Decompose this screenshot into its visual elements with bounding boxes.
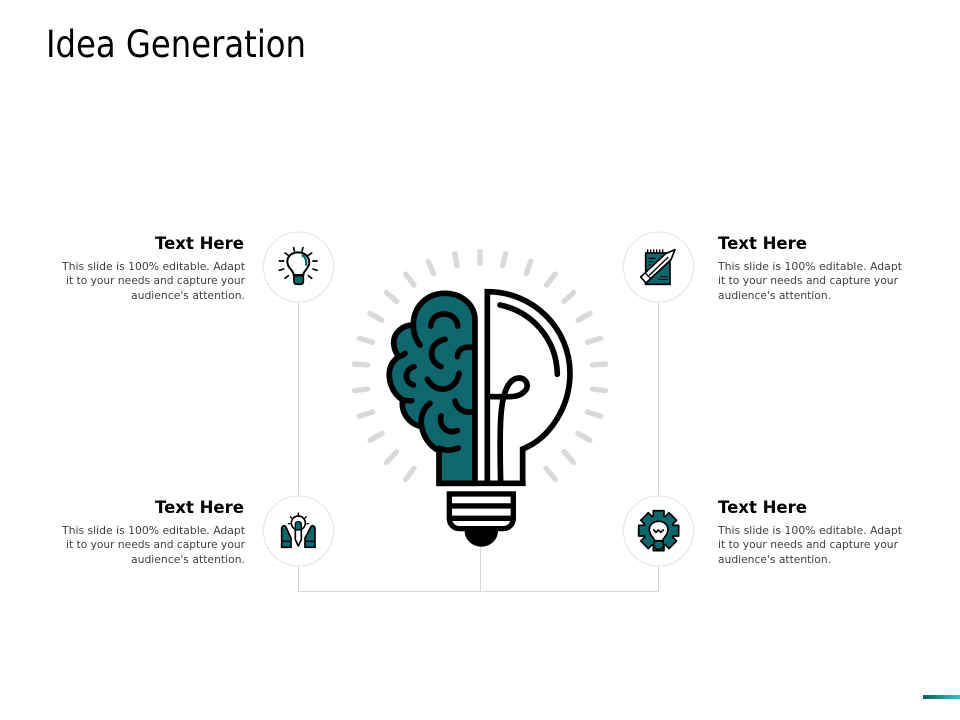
icon: gear with bulb in circle: [624, 496, 694, 566]
heading: Text Here: [155, 234, 244, 254]
title: Idea Generation: [46, 23, 306, 66]
text block: it to your needs and capture your: [66, 538, 245, 551]
text block: it to your needs and capture your: [66, 274, 245, 287]
heading: Text Here: [718, 498, 807, 518]
heading: Text Here: [718, 234, 807, 254]
text block: This slide is 100% editable. Adapt: [61, 524, 246, 537]
icon: central brain and light bulb: [354, 251, 606, 547]
brain half: [389, 293, 475, 483]
panel: bottom right item: [624, 496, 903, 566]
bulb socket: [449, 494, 513, 547]
text block: [61, 260, 246, 302]
icon: hands and pencil in circle: [264, 496, 334, 566]
bulb half: [437, 292, 570, 483]
radiating rays: [354, 251, 606, 479]
text block: it to your needs and capture your: [718, 274, 898, 287]
text block: audience's attention.: [718, 553, 831, 566]
text block: audience's attention.: [718, 289, 831, 302]
text block: This slide is 100% editable. Adapt: [717, 524, 903, 537]
panel: top left item: [61, 232, 333, 302]
panel: bottom left item: [61, 496, 333, 566]
text block: This slide is 100% editable. Adapt: [717, 260, 903, 273]
panel: top right item: [624, 232, 903, 302]
text block: This slide is 100% editable. Adapt: [61, 260, 246, 273]
text block: audience's attention.: [131, 553, 245, 566]
accent bar: [923, 695, 960, 699]
icon: notepad and pencil in circle: [624, 232, 694, 302]
text block: it to your needs and capture your: [718, 538, 898, 551]
text block: audience's attention.: [131, 289, 245, 302]
text block: [717, 524, 903, 566]
text block: [61, 524, 246, 566]
heading: Text Here: [155, 498, 244, 518]
text block: [717, 260, 903, 302]
icon: light bulb in circle: [264, 232, 334, 302]
connector lines: [298, 302, 658, 592]
